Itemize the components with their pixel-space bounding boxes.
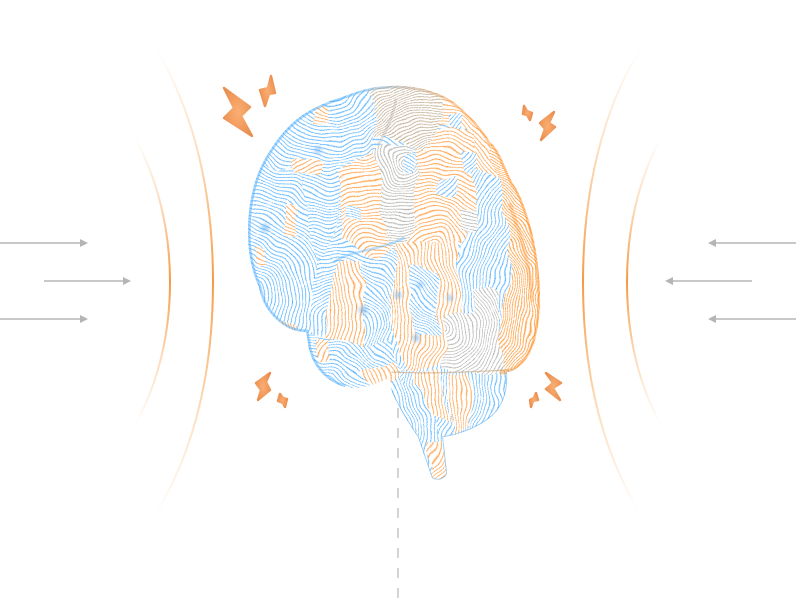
fleck: arch core xyxy=(402,150,414,172)
contour zone: central orange arches xyxy=(410,130,480,245)
contour zone: blue base xyxy=(308,124,512,384)
contour zone: central orange vertical xyxy=(390,243,470,372)
arrow: left middle xyxy=(44,277,131,285)
fleck: right shoulder xyxy=(462,150,478,174)
bolt: bottom left large xyxy=(256,373,270,400)
bolt: bottom left small xyxy=(278,394,287,407)
contour zone: cerebellum orange right xyxy=(448,374,472,432)
fleck: edge xyxy=(257,248,268,262)
bolt: top left small xyxy=(260,76,275,106)
fleck: central left xyxy=(346,206,361,220)
contour zone: brainstem xyxy=(394,383,441,475)
contour zone: brainstem orange xyxy=(426,440,447,480)
cerebellum and brainstem edge xyxy=(392,372,507,480)
arrow: right middle xyxy=(665,277,752,285)
bolt: bottom right small xyxy=(530,393,538,407)
arrow: left top xyxy=(0,239,88,247)
arrow: right bottom xyxy=(708,315,796,323)
arrow: right top xyxy=(708,239,796,247)
contour zone: top gray cap xyxy=(368,86,444,150)
contour zone: cerebellum orange stripe xyxy=(412,372,450,420)
fleck: lower lobe xyxy=(276,318,297,331)
right arrows xyxy=(665,239,796,323)
brain folds and dense spots xyxy=(261,100,532,373)
orange flecks in the left hemisphere xyxy=(257,106,396,388)
contour zone: cerebellum blue base xyxy=(404,368,518,442)
left inner pressure arc xyxy=(135,138,170,425)
fleck: upper right xyxy=(440,176,456,198)
contour zone: gray blue central arch xyxy=(374,140,420,250)
fleck: upper middle xyxy=(292,160,322,176)
contour zone: lower gray band xyxy=(440,305,505,372)
fleck: lower xyxy=(316,340,328,360)
fleck: gray column xyxy=(462,210,474,232)
left arrows xyxy=(0,239,131,323)
contour zone: right edge orange xyxy=(489,144,540,370)
right inner pressure arc xyxy=(627,138,661,425)
bolt: top right small xyxy=(523,106,532,120)
fleck: top xyxy=(448,116,462,132)
fleck: bottom xyxy=(362,360,396,388)
brain edge: dense outline shading xyxy=(248,86,540,387)
contour zone: central left arches xyxy=(338,152,392,259)
bolt: top right large xyxy=(540,112,555,140)
left outer pressure arc xyxy=(155,48,213,515)
contour zone: far left blue xyxy=(248,164,317,334)
fleck: central column xyxy=(412,270,440,338)
contour zone: upper left blue xyxy=(262,89,377,260)
fleck: middle xyxy=(286,205,298,236)
contour zone: bottom left blue xyxy=(302,332,400,388)
fleck: lower right xyxy=(474,290,500,320)
fleck: upper xyxy=(313,106,329,124)
contour zone: right blue lobe xyxy=(458,165,510,350)
bolt: top left large xyxy=(224,88,252,136)
lightning bolts xyxy=(224,76,561,407)
arrow: left bottom xyxy=(0,315,88,323)
contour zone: left central orange fold xyxy=(324,260,366,346)
contour zone: top right orange xyxy=(438,96,498,178)
bolt: bottom right large xyxy=(546,373,561,400)
right outer pressure arc xyxy=(583,48,641,515)
brain contour illustration xyxy=(248,86,540,480)
blue flecks in the right hemisphere xyxy=(345,116,500,338)
dashed center line xyxy=(397,408,399,600)
